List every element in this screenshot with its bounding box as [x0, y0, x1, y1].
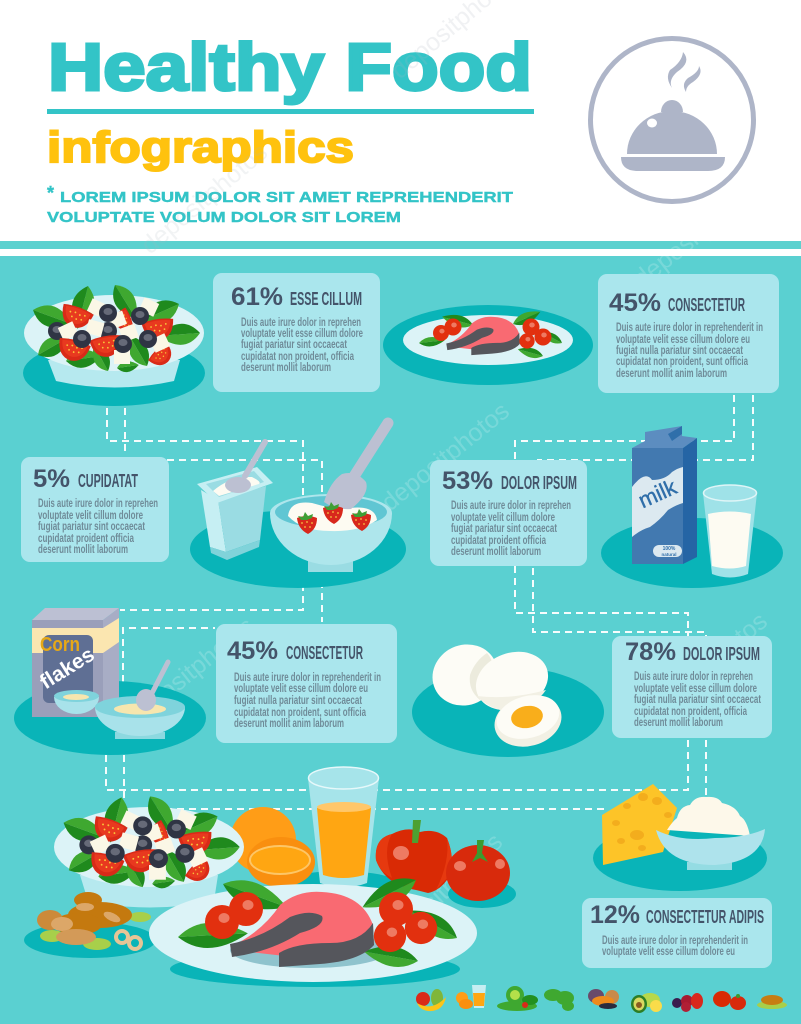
- icon: avocado and lemon: [631, 993, 662, 1013]
- intro text: *: [47, 183, 54, 203]
- carton: milk: [634, 474, 681, 513]
- panel: 5% cupidatat: [21, 457, 169, 562]
- body text: [451, 500, 571, 558]
- body text: voluptate velit esse cillum dolore eu: [234, 683, 368, 695]
- pepper: [376, 820, 452, 893]
- panel: 45% consectetur lower: [216, 624, 397, 743]
- panel: 45% consectetur: [598, 274, 779, 393]
- title rule: [47, 109, 534, 114]
- percent: 78%: [625, 638, 676, 666]
- body text: voluptate velit esse cillum dolore: [241, 328, 363, 340]
- body text: Duis aute irure dolor in reprehen: [241, 317, 361, 329]
- body text: Duis aute irure dolor in reprehen: [451, 500, 571, 512]
- carton: 100%: [663, 546, 676, 552]
- carton: natural: [661, 552, 677, 557]
- teal stripe: [0, 241, 801, 249]
- watermark: depositphotos: [121, 612, 260, 732]
- title: Healthy Food: [48, 30, 532, 105]
- body text: deserunt mollit anim laborum: [616, 368, 727, 380]
- intro text: VOLUPTATE VOLUM DOLOR SIT LOREM: [47, 210, 401, 226]
- subtitle: infographics: [47, 123, 354, 172]
- percent: 61%: [231, 283, 283, 311]
- food: juice glass: [308, 767, 379, 888]
- cereal box: Corn: [40, 634, 80, 656]
- percent: 45%: [227, 637, 278, 665]
- food: nuts: [24, 892, 156, 958]
- food: tomato and pepper: [280, 820, 516, 908]
- body text: [241, 317, 363, 374]
- intro text: [47, 183, 513, 226]
- icon: salad plate: [497, 986, 538, 1011]
- body text: cupidatat non proident, officia: [634, 706, 747, 718]
- percent: 53%: [442, 467, 493, 495]
- watermark: depositphotos: [634, 607, 773, 727]
- food: yogurt and bowl: [190, 423, 406, 588]
- body text: voluptate velit cillum dolore: [38, 510, 143, 522]
- food: salmon plate large: [149, 870, 477, 987]
- intro text: LOREM IPSUM DOLOR SIT AMET REPREHENDERIT: [60, 190, 513, 206]
- label: DOLOR IPSUM: [501, 473, 577, 493]
- label: CUPIDATAT: [78, 471, 138, 491]
- body text: fugiat pariatur sint occaecat: [241, 339, 347, 351]
- food: salad bowl: [23, 280, 205, 406]
- icon: orange juice: [456, 985, 486, 1009]
- body text: Duis aute irure dolor in reprehen: [38, 498, 158, 510]
- body text: deserunt mollit laborum: [634, 717, 723, 729]
- body text: fugiat nulla pariatur sint occaecat: [234, 695, 362, 707]
- yogurt cup: [197, 442, 273, 560]
- food: corn flakes: [14, 608, 206, 755]
- icon: nuts: [757, 995, 787, 1009]
- percent: 5%: [33, 465, 70, 493]
- body text: [234, 672, 381, 730]
- cereal box: flakes: [36, 643, 99, 694]
- body text: fugiat pariatur sint occaecat: [38, 521, 145, 533]
- food: salmon plate: [383, 305, 593, 385]
- dashed connectors: [106, 395, 753, 809]
- small bowl: [54, 690, 99, 714]
- panel: 12% consectetur adipis: [582, 898, 772, 968]
- teal panel background: [0, 256, 801, 1024]
- food: salad bowl large: [54, 791, 244, 908]
- cereal box: [32, 608, 119, 717]
- panel: 78% dolor ipsum: [612, 636, 772, 738]
- icon row: [416, 985, 787, 1013]
- food: eggs: [412, 634, 604, 757]
- body text: voluptate velit esse cillum dolore eu: [602, 946, 735, 958]
- icon: herbs: [544, 989, 574, 1011]
- body text: Duis aute irure dolor in reprehenderit in: [234, 672, 381, 684]
- body text: [634, 671, 761, 729]
- body text: [616, 322, 763, 380]
- bowl with strawberries: [270, 423, 392, 572]
- glass: [703, 485, 757, 578]
- panel: 53% dolor ipsum: [430, 460, 587, 566]
- body text: fugiat pariatur sint occaecat: [451, 523, 557, 535]
- food: oranges: [230, 807, 315, 887]
- watermark: depositphotos: [136, 138, 273, 260]
- percent: 12%: [590, 901, 640, 929]
- tomato: [446, 840, 510, 901]
- body text: deserunt mollit laborum: [241, 362, 331, 374]
- label: ESSE CILLUM: [290, 289, 362, 309]
- percent: 45%: [609, 289, 661, 317]
- body text: [602, 935, 748, 958]
- spoon: [150, 662, 168, 697]
- carton: [632, 426, 697, 564]
- body text: voluptate velit cillum dolore: [451, 512, 555, 524]
- label: CONSECTETUR: [668, 295, 745, 315]
- body text: deserunt mollit laborum: [451, 546, 541, 558]
- icon: berries: [672, 993, 703, 1012]
- body text: cupidatat non proident, sunt officia: [234, 707, 366, 719]
- big bowl: [95, 689, 185, 739]
- food: cheese and cottage cheese: [593, 784, 767, 891]
- icon: cloche: [590, 38, 754, 202]
- body text: [38, 498, 158, 556]
- icon: fruit: [416, 989, 446, 1011]
- body text: fugiat nulla pariatur sint occaecat: [616, 345, 743, 357]
- icon: pepper and tomato: [713, 991, 746, 1010]
- body text: cupidatat proident officia: [38, 533, 134, 545]
- watermark: depositphotos: [377, 828, 508, 956]
- watermark: depositphotos: [628, 175, 768, 293]
- label: CONSECTETUR: [286, 643, 363, 663]
- body text: cupidatat proident officia: [451, 535, 546, 547]
- food: milk carton and glass: [601, 426, 783, 588]
- panel: 61% esse cillum: [213, 273, 380, 392]
- body text: cupidatat non proident, officia: [241, 351, 354, 363]
- body text: deserunt mollit anim laborum: [234, 718, 344, 730]
- icon: dried fruit: [588, 989, 619, 1009]
- cottage cheese bowl: [656, 797, 765, 870]
- watermark: depositphotos: [376, 397, 515, 517]
- body text: deserunt mollit laborum: [38, 544, 128, 556]
- cheese wedge: [602, 784, 677, 865]
